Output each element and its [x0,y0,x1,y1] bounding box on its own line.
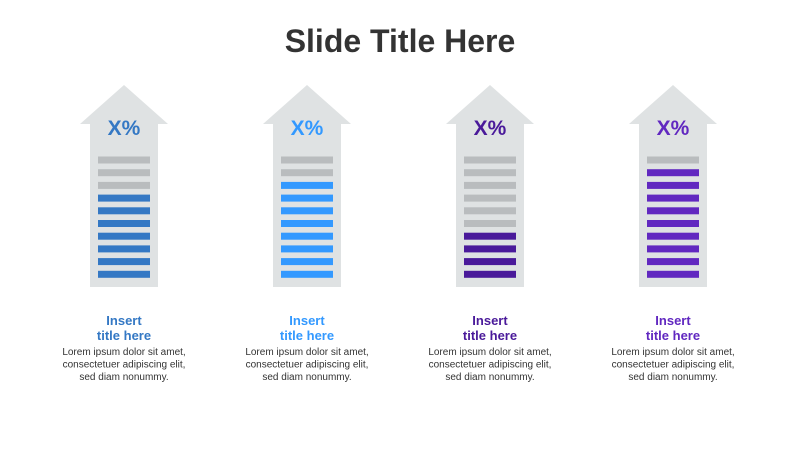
column 4 [611,85,735,383]
text block 1: consectetuer adipiscing elit, [63,360,185,370]
text block 4: consectetuer adipiscing elit, [612,360,734,370]
text block 3 [428,313,552,383]
text block 3: Lorem ipsum dolor sit amet, [428,347,552,358]
text block 1: Insert [106,313,142,328]
arrow 3: X% [474,117,507,140]
text block 3: title here [463,328,517,343]
text block 4: title here [646,328,700,343]
text block 4: Lorem ipsum dolor sit amet, [611,347,735,358]
arrow 4: X% [657,117,690,140]
text block 3: Insert [472,313,508,328]
text block 1 [62,313,186,383]
text block 3: sed diam nonummy. [445,372,535,383]
arrow 2: X% [291,117,324,140]
text block 3: consectetuer adipiscing elit, [429,360,551,370]
text block 2: title here [280,328,334,343]
arrow 3 [446,85,534,287]
text block 2 [245,313,369,383]
arrow 1 [80,85,168,287]
text block 1: Lorem ipsum dolor sit amet, [62,347,186,358]
arrow 4 [629,85,717,287]
text block 2: Lorem ipsum dolor sit amet, [245,347,369,358]
text block 4 [611,313,735,383]
text block 2: Insert [289,313,325,328]
title: Slide Title Here [285,23,515,59]
text block 2: consectetuer adipiscing elit, [246,360,368,370]
column 1 [62,85,186,383]
column 2 [245,85,369,383]
arrow 1: X% [108,117,141,140]
text block 2: sed diam nonummy. [262,372,352,383]
column 3 [428,85,552,383]
text block 4: Insert [655,313,691,328]
text block 1: sed diam nonummy. [79,372,169,383]
arrow 2 [263,85,351,287]
text block 4: sed diam nonummy. [628,372,718,383]
text block 1: title here [97,328,151,343]
